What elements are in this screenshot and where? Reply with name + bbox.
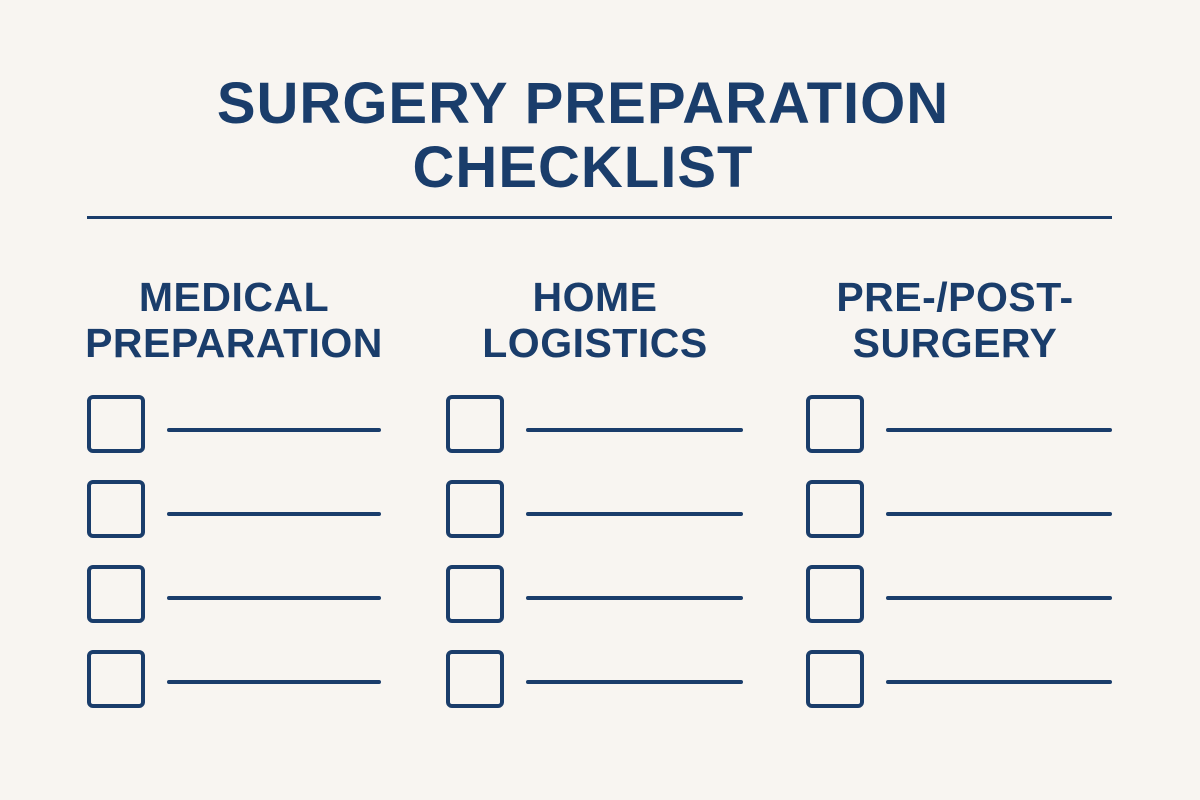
heading: medical preparation: MEDICAL bbox=[139, 274, 329, 320]
heading: home logistics bbox=[482, 274, 708, 366]
heading: medical preparation bbox=[85, 274, 383, 366]
title rule bbox=[87, 216, 1112, 219]
column: home checklist bbox=[446, 395, 743, 708]
column: medical checklist bbox=[87, 395, 381, 708]
heading: pre-/post-surgery bbox=[836, 274, 1074, 366]
title bbox=[217, 71, 949, 200]
heading: home logistics: HOME bbox=[532, 274, 658, 320]
title: SURGERY PREPARATION bbox=[217, 71, 949, 136]
heading: pre-/post-surgery: SURGERY bbox=[853, 320, 1057, 366]
heading: pre-/post-surgery: PRE-/POST- bbox=[836, 274, 1074, 320]
heading: medical preparation: PREPARATION bbox=[85, 320, 383, 366]
title: CHECKLIST bbox=[413, 135, 753, 200]
column: surgery checklist bbox=[806, 395, 1112, 708]
heading: home logistics: LOGISTICS bbox=[482, 320, 708, 366]
